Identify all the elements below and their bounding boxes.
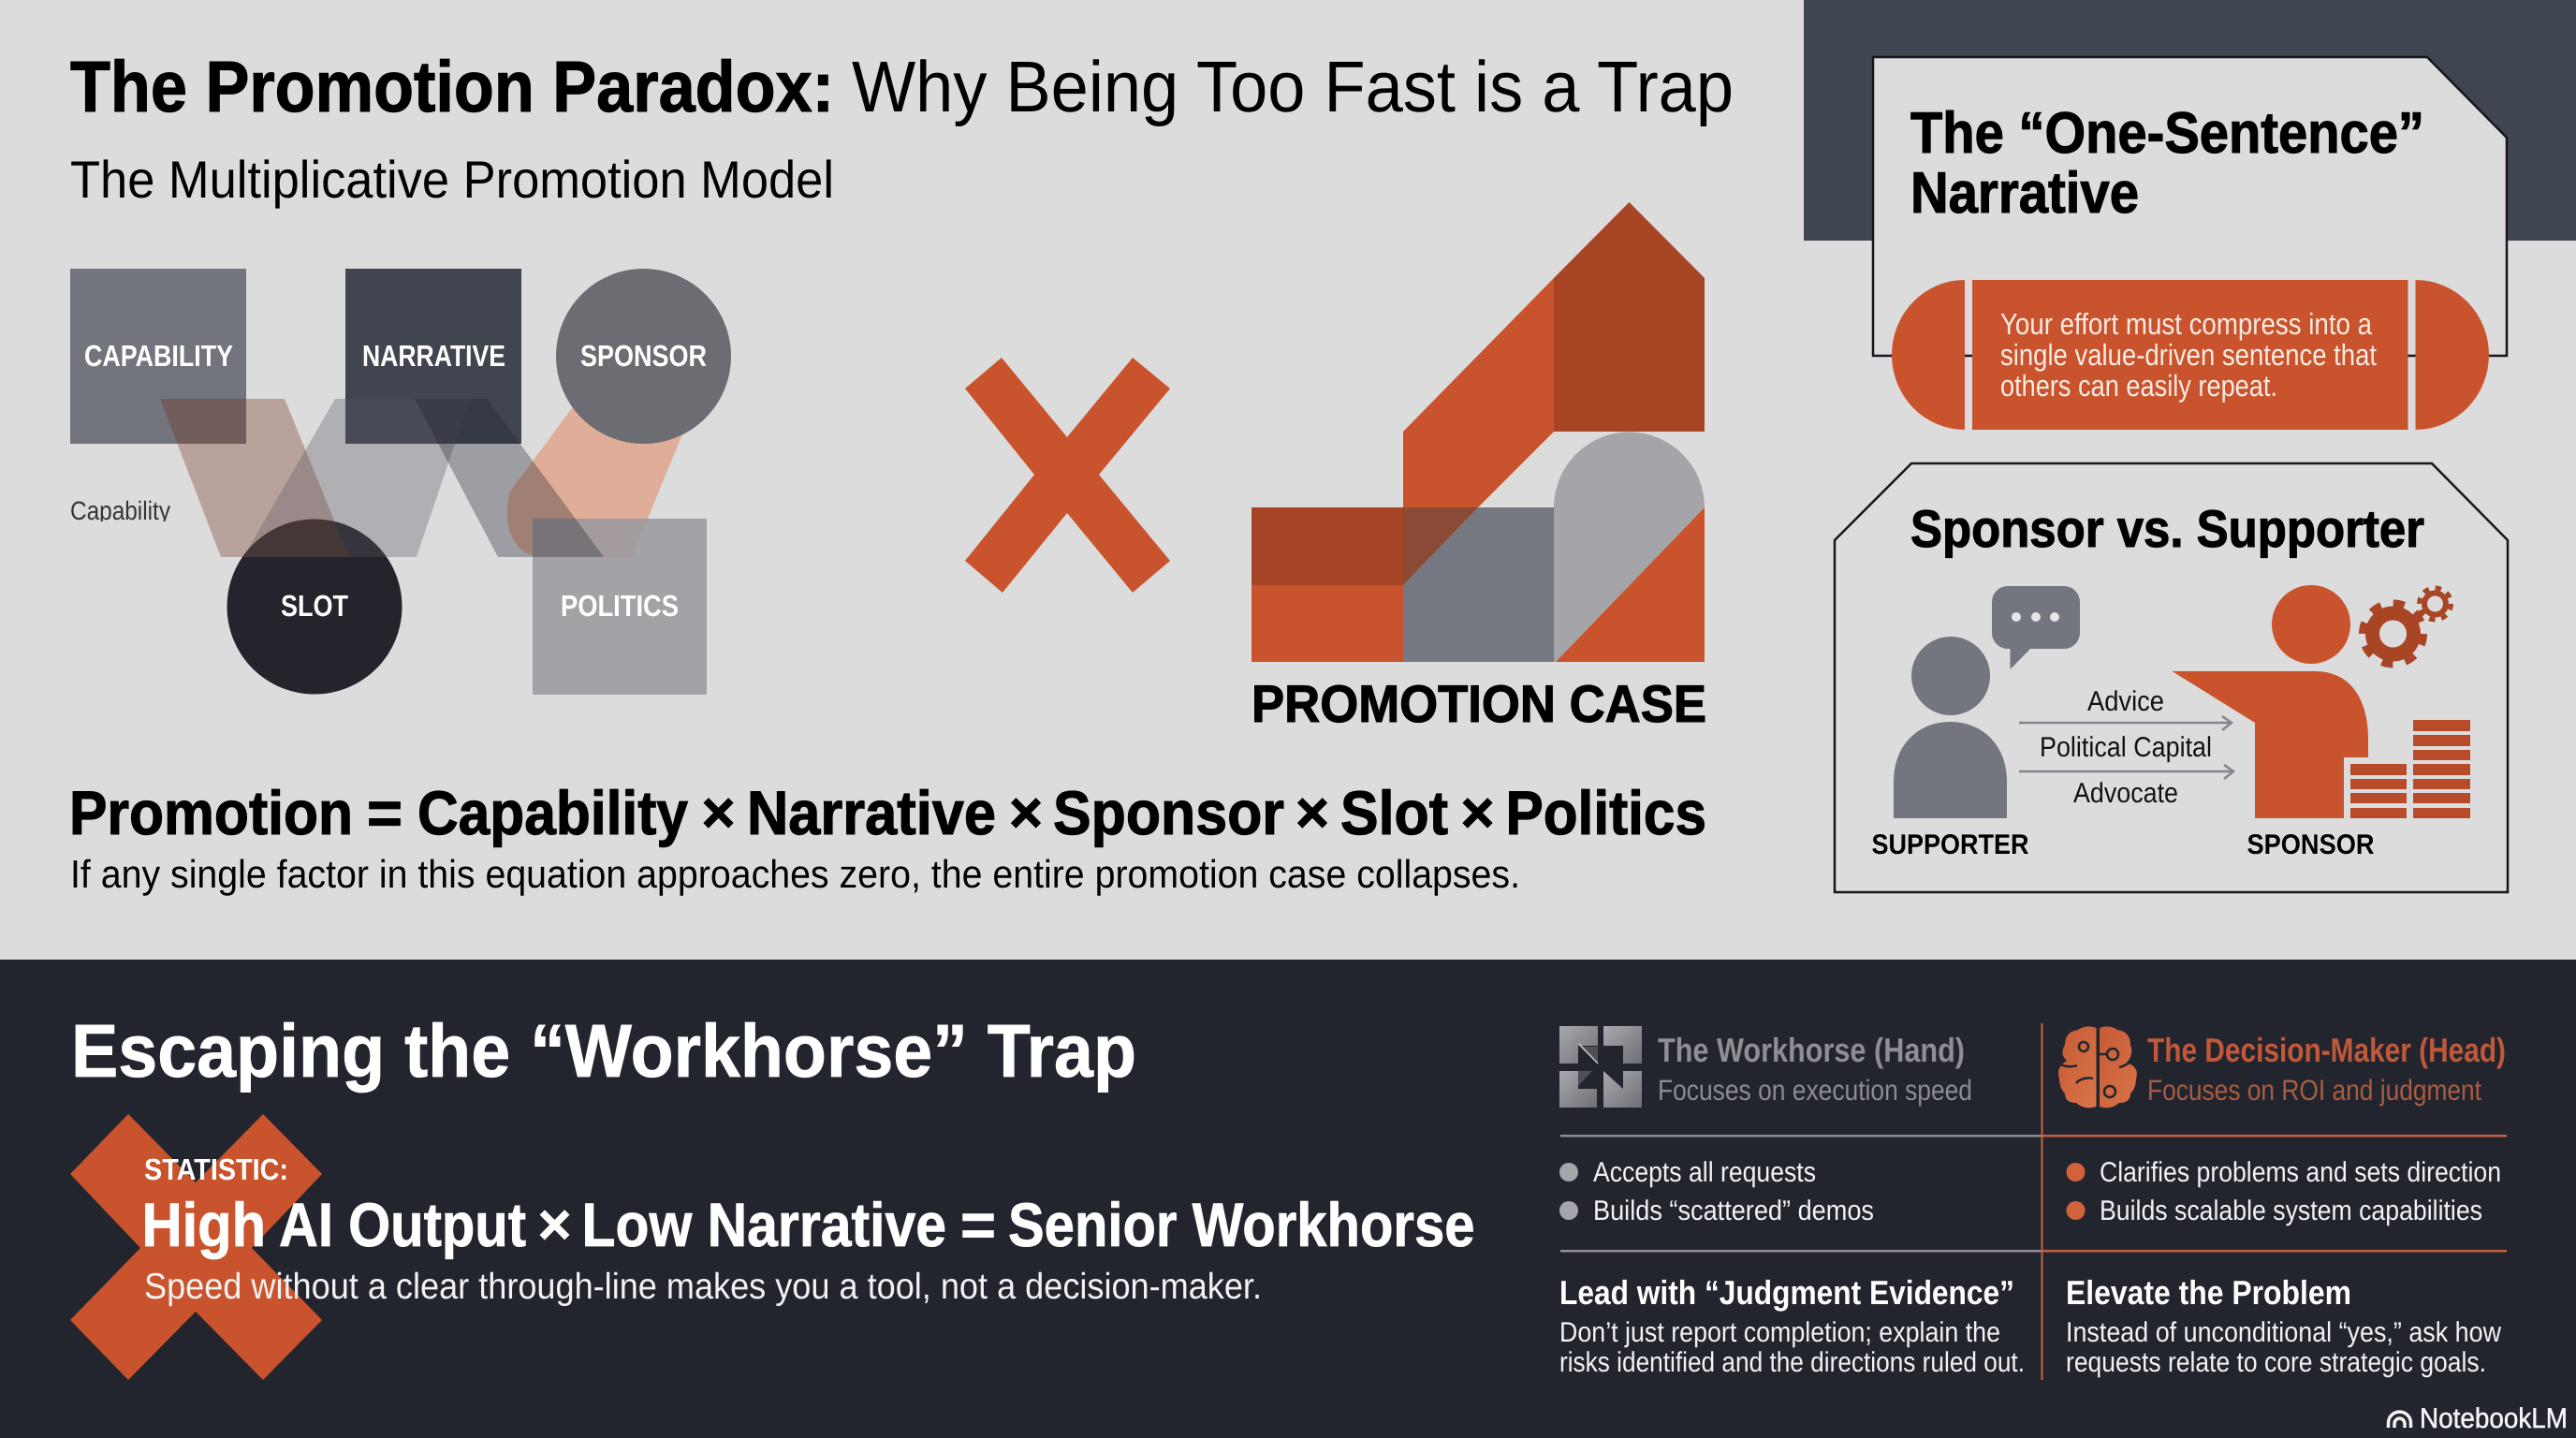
advice heading: Elevate the Problem bbox=[2066, 1273, 2351, 1312]
bullet: scalable: Builds scalable system capabilities bbox=[2100, 1196, 2482, 1226]
card outline bbox=[1873, 57, 2507, 356]
statistic formula: Low Narrative bbox=[582, 1190, 946, 1259]
panel heading: Sponsor vs. Supporter bbox=[1910, 499, 2424, 558]
advice text bbox=[1559, 1317, 2025, 1378]
orange ramp bbox=[1403, 278, 1554, 507]
multiply icon bbox=[965, 358, 1170, 593]
label: slot: SLOT bbox=[281, 589, 348, 623]
statistic formula bbox=[142, 1190, 1475, 1259]
notebooklm logo: NotebookLM bbox=[2420, 1403, 2568, 1434]
main title: Why Being Too Fast is a Trap bbox=[852, 47, 1734, 127]
equation: Promotion bbox=[69, 778, 353, 847]
equation caption: If any single factor in this equation approaches zero, the entire promotion case collapses. bbox=[70, 852, 1520, 896]
subtitle: The Multiplicative Promotion Model bbox=[70, 150, 834, 209]
statistic formula: × bbox=[537, 1193, 571, 1257]
equation bbox=[69, 778, 1706, 847]
pill text: others can easily repeat. bbox=[2000, 369, 2277, 403]
equation: × bbox=[1009, 781, 1043, 845]
equation: × bbox=[1460, 781, 1494, 845]
promotion case graphic bbox=[1251, 202, 1705, 662]
connector: grey band bbox=[243, 399, 470, 557]
statistic formula: = bbox=[960, 1190, 996, 1259]
connector: peach capsule bbox=[507, 408, 682, 557]
equation: Narrative bbox=[747, 778, 996, 847]
panel: one-sentence narrative bbox=[1873, 57, 2507, 430]
decision-maker title: The Decision-Maker (Head) bbox=[2147, 1031, 2506, 1069]
icon: supporter figure bbox=[1894, 637, 2007, 818]
connector: tan band bbox=[160, 399, 349, 557]
statistic formula: Senior Workhorse bbox=[1008, 1190, 1475, 1259]
pill centre bbox=[1972, 280, 2408, 430]
pill right cap bbox=[2415, 280, 2489, 430]
panel: sponsor vs supporter bbox=[1835, 463, 2508, 892]
label: capability: CAPABILITY bbox=[84, 339, 233, 373]
icon: tall stack bbox=[2413, 720, 2470, 818]
bullet: scattered demos: Builds “scattered” demos bbox=[1593, 1196, 1874, 1226]
orange corner triangle bbox=[1556, 507, 1705, 662]
icon: speech bubble bbox=[1992, 586, 2080, 669]
equation: Capability bbox=[417, 778, 688, 847]
arrow: advocate bbox=[2019, 765, 2233, 779]
icon: large orange cross bbox=[70, 1114, 322, 1380]
workhorse subtitle: Focuses on execution speed bbox=[1658, 1074, 1972, 1107]
comparison table bbox=[1559, 1023, 2507, 1380]
label: advocate: Advocate bbox=[2073, 778, 2178, 809]
icon: sponsor figure bbox=[2172, 585, 2368, 818]
arrow: advice bbox=[2019, 716, 2232, 730]
diagram: five promotion factors bbox=[70, 269, 731, 695]
statistic label: STATISTIC: bbox=[144, 1152, 288, 1186]
card heading: Narrative bbox=[1910, 161, 2139, 226]
icon: short stack bbox=[2350, 764, 2407, 818]
clipped caption: capability: Capability bbox=[70, 496, 170, 525]
main title: The Promotion Paradox: bbox=[70, 47, 834, 127]
overlap triangle bbox=[1403, 507, 1478, 585]
dark bottom band bbox=[0, 960, 2576, 1438]
grey arch bbox=[1554, 433, 1705, 662]
divider: left lower bbox=[1560, 1250, 2042, 1253]
panel outline bbox=[1835, 463, 2508, 892]
promotion case label: PROMOTION CASE bbox=[1251, 674, 1706, 733]
label: politics: POLITICS bbox=[561, 589, 679, 623]
equation: Sponsor bbox=[1053, 778, 1284, 847]
label: sponsor: SPONSOR bbox=[580, 339, 707, 373]
statistic formula: High bbox=[142, 1190, 266, 1259]
equation: × bbox=[1295, 781, 1329, 845]
label: narrative: NARRATIVE bbox=[362, 339, 505, 373]
equation: Slot bbox=[1340, 778, 1448, 847]
column: workhorse bbox=[1559, 1026, 2025, 1378]
divider: right upper bbox=[2042, 1135, 2507, 1137]
statistic block bbox=[142, 1152, 1475, 1307]
pill left cap bbox=[1892, 280, 1965, 430]
equation: × bbox=[702, 781, 736, 845]
label: political capital: Political Capital bbox=[2040, 732, 2212, 763]
bullet: clarifies: Clarifies problems and sets direction bbox=[2100, 1157, 2501, 1188]
advice text bbox=[2066, 1317, 2501, 1378]
advice text: Don’t just report completion; explain the bbox=[1559, 1317, 2000, 1348]
advice text: requests relate to core strategic goals. bbox=[2066, 1347, 2486, 1378]
pill text: Your effort must compress into a bbox=[2000, 307, 2372, 341]
advice heading: Lead with “Judgment Evidence” bbox=[1559, 1273, 2014, 1312]
card heading bbox=[1910, 101, 2424, 226]
label: advice: Advice bbox=[2087, 686, 2164, 717]
divider: vertical bbox=[2041, 1023, 2042, 1380]
equation: = bbox=[367, 778, 402, 847]
icon: brain bbox=[2058, 1026, 2137, 1108]
column: decision-maker bbox=[2058, 1026, 2506, 1378]
dark orange arrow house bbox=[1554, 202, 1705, 432]
card heading: The “One-Sentence” bbox=[1910, 101, 2424, 166]
icon: gears bbox=[2363, 588, 2451, 664]
factor: politics square bbox=[533, 519, 707, 695]
slate header block bbox=[1804, 0, 2576, 241]
label: sponsor: SPONSOR bbox=[2247, 829, 2375, 860]
base centre grey block bbox=[1403, 507, 1554, 662]
equation: Politics bbox=[1505, 778, 1706, 847]
divider: right lower bbox=[2042, 1250, 2507, 1253]
pill text: single value-driven sentence that bbox=[2000, 338, 2377, 372]
statistic formula: AI Output bbox=[279, 1190, 526, 1259]
section heading: escaping the workhorse trap: Escaping the “Workhorse” Trap bbox=[71, 1009, 1136, 1093]
factor: narrative square bbox=[345, 269, 521, 444]
pill text bbox=[2000, 307, 2377, 403]
advice text: Instead of unconditional “yes,” ask how bbox=[2066, 1317, 2501, 1348]
workhorse title: The Workhorse (Hand) bbox=[1658, 1031, 1965, 1069]
label: supporter: SUPPORTER bbox=[1872, 829, 2029, 860]
factor: slot circle bbox=[227, 519, 402, 695]
factor: capability square bbox=[70, 269, 246, 444]
advice text: risks identified and the directions ruled out. bbox=[1559, 1347, 2025, 1378]
bullet: accepts: Accepts all requests bbox=[1593, 1157, 1816, 1188]
connector: dark band bbox=[415, 399, 604, 557]
decision-maker subtitle: Focuses on ROI and judgment bbox=[2147, 1074, 2481, 1107]
main title bbox=[70, 47, 1734, 127]
divider: left upper bbox=[1560, 1135, 2042, 1137]
base left dark block bbox=[1251, 507, 1403, 585]
statistic caption: Speed without a clear through-line makes you a tool, not a decision-maker. bbox=[144, 1267, 1262, 1307]
icon: workhorse arrows bbox=[1559, 1026, 1642, 1108]
factor: sponsor circle bbox=[556, 269, 731, 444]
base left orange block bbox=[1251, 585, 1403, 662]
